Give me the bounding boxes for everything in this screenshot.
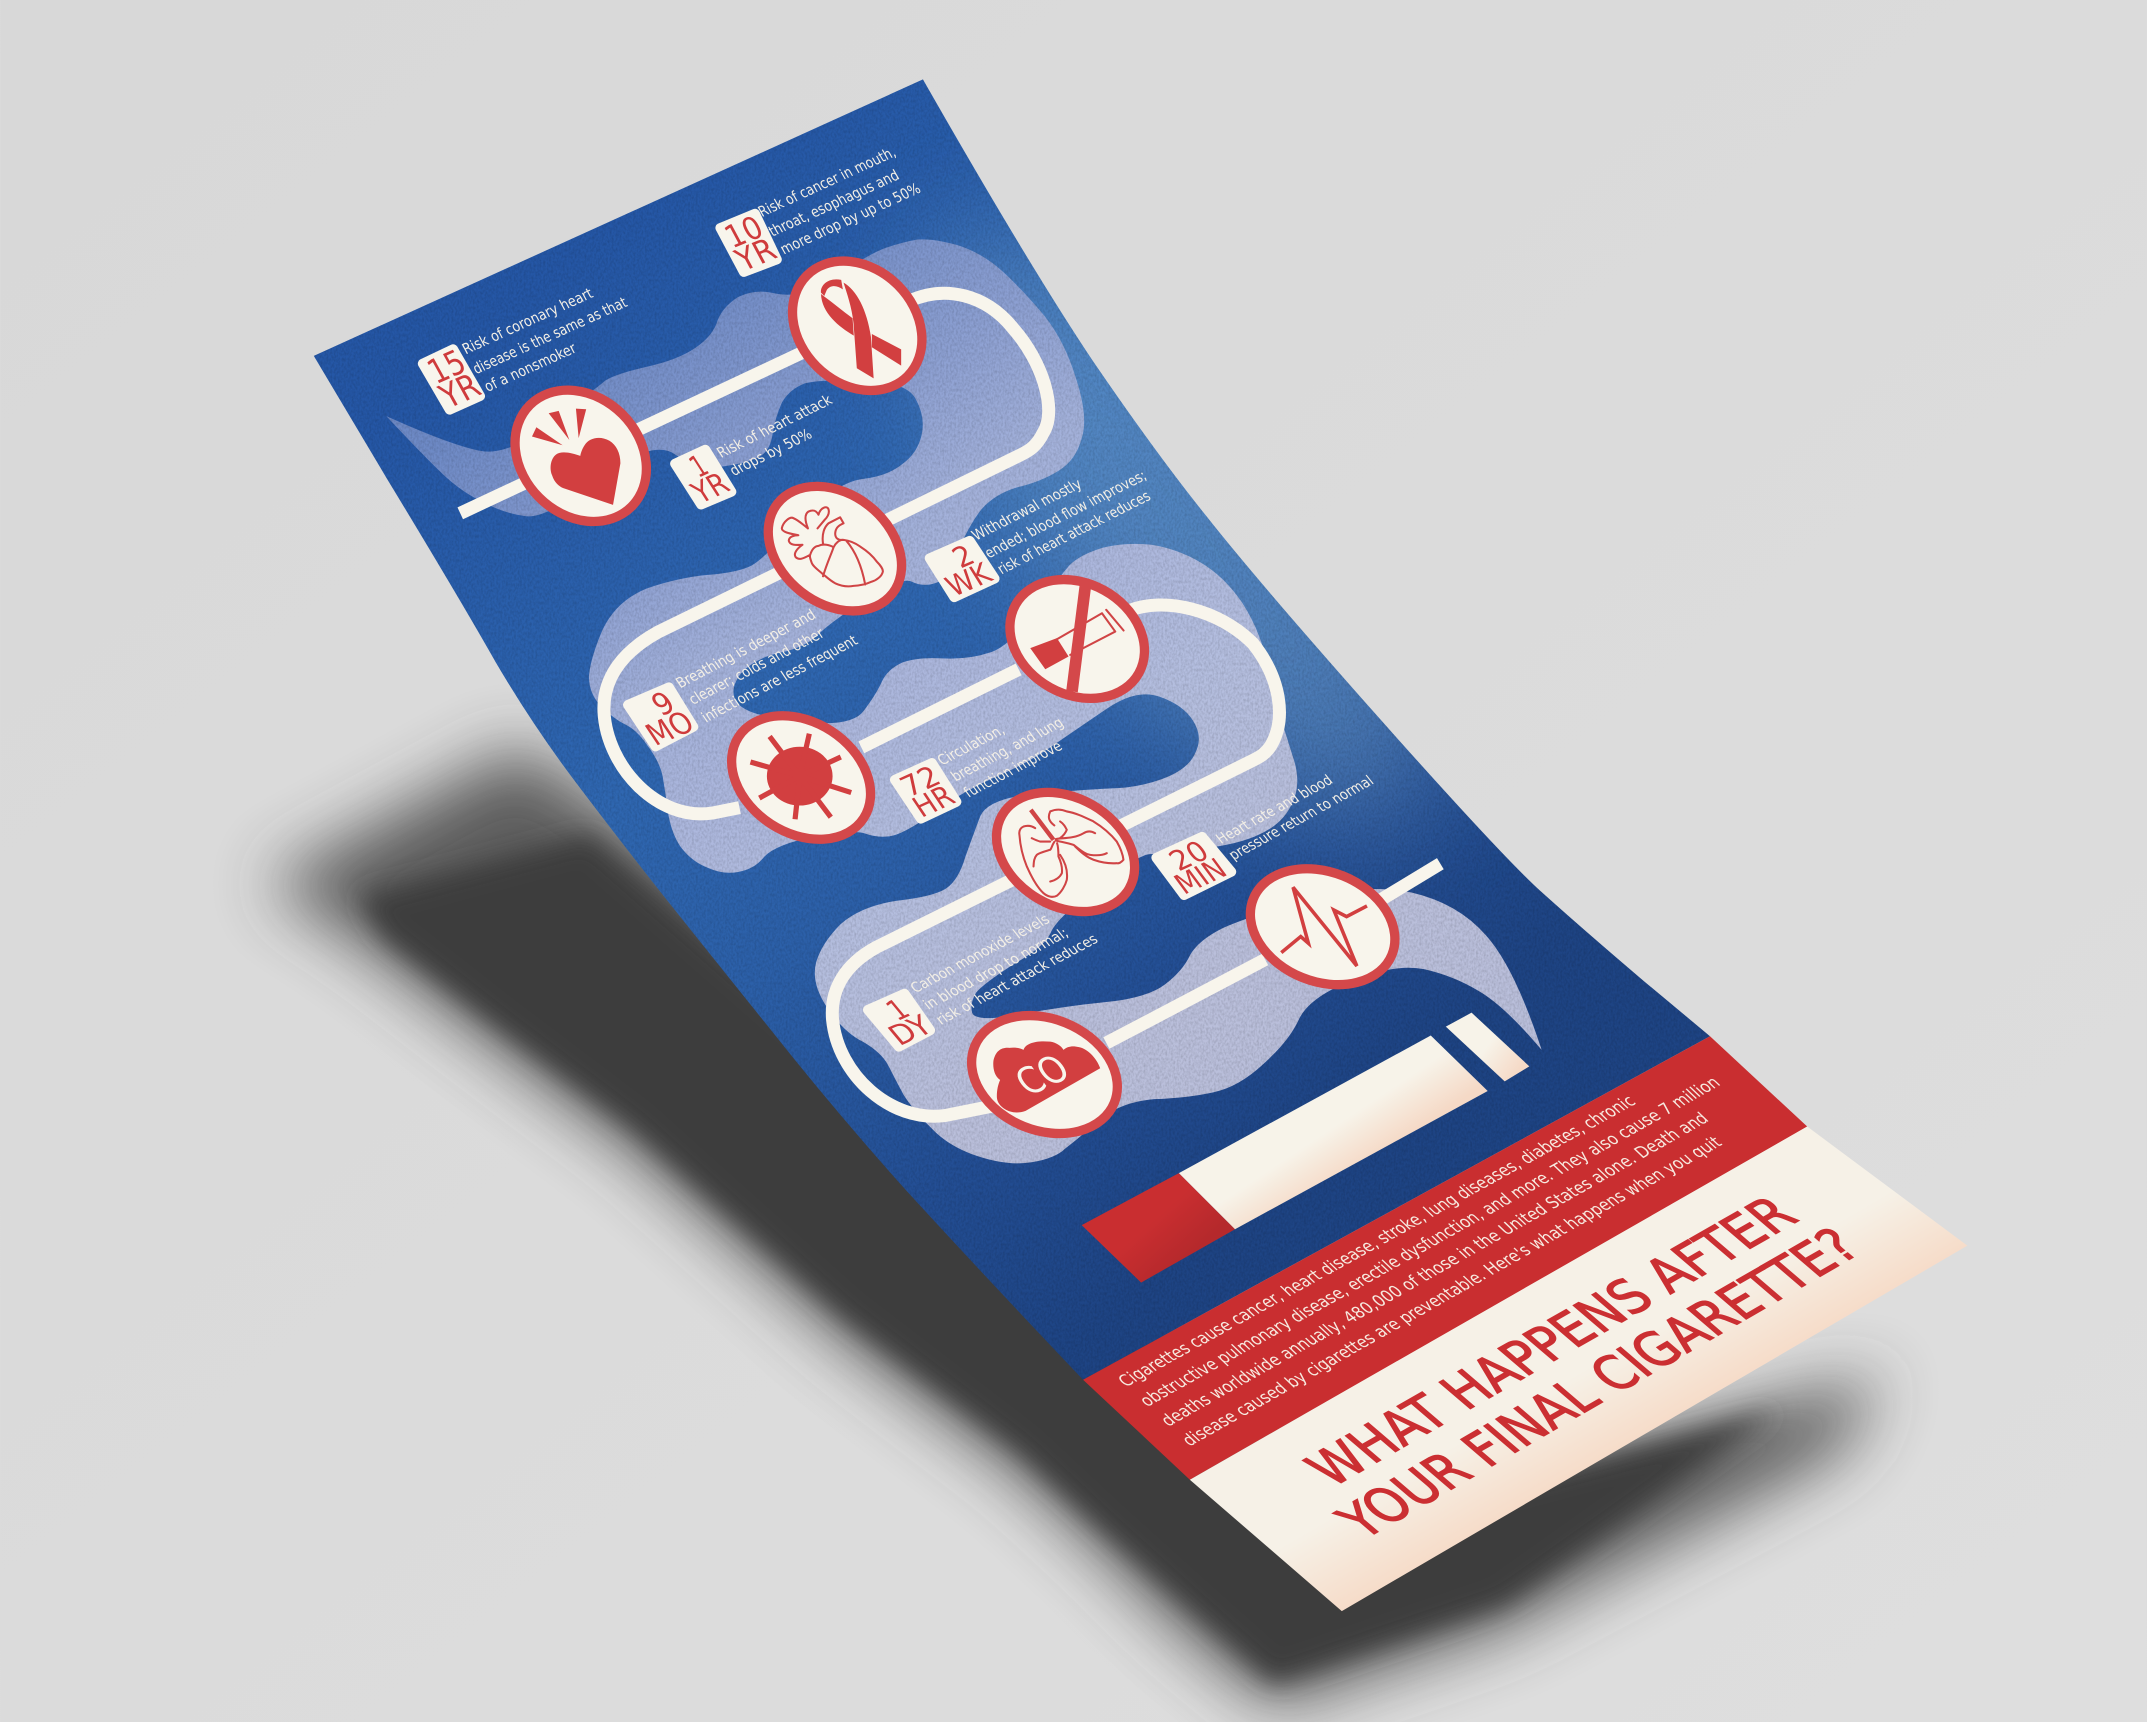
- time badge: 15 YR: YR: [432, 366, 487, 416]
- text: 20 minute benefit: pressure return to normal: [1225, 772, 1377, 863]
- icon: carbon monoxide cloud: CO: [1007, 1047, 1079, 1104]
- time badge: 20 MIN: 20: [1163, 835, 1216, 878]
- text: 15 year benefit: of a nonsmoker: [481, 339, 580, 396]
- icon: virus: [708, 690, 894, 865]
- intro paragraph: obstructive pulmonary disease, erectile dysfunction, and more. They also cause 7 million: [1136, 1073, 1725, 1411]
- time badge: 1 YR: 1: [683, 449, 715, 485]
- milestone: 9 months: [628, 606, 894, 865]
- time badge: 2 WK: 2: [946, 538, 981, 575]
- milestone: 20 minutes: [1156, 772, 1412, 1005]
- milestone: 15 years: [421, 284, 673, 548]
- text: 10 year benefit: [755, 143, 924, 258]
- text: 9 month benefit: clearer; colds and other: [685, 624, 828, 708]
- paper drop shadow: [267, 746, 1882, 1708]
- text: 15 year benefit: Risk of coronary heart: [459, 284, 596, 358]
- time badge: 72 HR: HR: [906, 779, 961, 824]
- icon: heart with rays: [488, 363, 673, 548]
- time badge: 15 YR: [421, 343, 487, 416]
- text: 2 week benefit: risk of heart attack reduces: [994, 487, 1154, 578]
- text: 72 hour benefit: Circulation,: [934, 721, 1008, 769]
- time badge: 15 YR: 15: [421, 343, 473, 391]
- intro paragraph: deaths worldwide annually, 480,000 of those in the United States alone. Death and: [1157, 1109, 1713, 1430]
- time badge: 9 MO: MO: [640, 705, 701, 753]
- time badge: 2 WK: [929, 538, 999, 603]
- icon: no smoking: [989, 556, 1166, 722]
- intro paragraph: Cigarettes cause cancer, heart disease, stroke, lung diseases, diabetes, chronic: [1114, 1092, 1640, 1391]
- text: 1 day benefit: in blood drop to normal;: [920, 924, 1072, 1013]
- text: 1 year benefit: drops by 50%: [726, 425, 815, 479]
- intro paragraph: disease caused by cigarettes are preventable. Here's what happens when you quit: [1178, 1133, 1726, 1450]
- cream title band: [1190, 1127, 1967, 1611]
- text: 15 year benefit: [459, 284, 630, 396]
- milestone: 10 years: [718, 143, 948, 417]
- time badge: 72 HR: 72: [894, 759, 947, 804]
- text: 72 hour benefit: breathing, and lung: [947, 714, 1067, 785]
- cigarette body: [1179, 1036, 1488, 1229]
- time badge: 9 MO: 9: [645, 686, 682, 724]
- cigarette illustration: [1082, 1013, 1529, 1283]
- icon: lungs: [975, 768, 1156, 936]
- cigarette ash tip: [1446, 1013, 1529, 1081]
- text: 20 minute benefit: [1212, 772, 1377, 863]
- cigarette filter: [1082, 1173, 1235, 1283]
- text: 10 year benefit: Risk of cancer in mouth,: [755, 143, 899, 221]
- milestone: 72 hours: [894, 714, 1156, 936]
- timeline path: [460, 293, 1440, 1116]
- time badge: 10 YR: YR: [728, 231, 783, 279]
- text: 9 month benefit: Breathing is deeper and: [672, 606, 819, 692]
- icon: carbon monoxide cloud: [954, 995, 1135, 1155]
- icon: anatomical heart: [744, 461, 926, 637]
- smoke ribbon: [386, 239, 1542, 1163]
- time badge: 1 DY: DY: [881, 1009, 940, 1052]
- text: 2 week benefit: ended; blood flow improves;: [981, 467, 1150, 562]
- milestone: 1 year: [675, 391, 926, 637]
- red intro band: [1083, 1036, 1807, 1480]
- time badge: 2 WK: WK: [939, 556, 999, 603]
- icon: heartbeat: [1233, 848, 1412, 1005]
- time badge: 20 MIN: MIN: [1168, 853, 1234, 901]
- icon: cancer ribbon: [766, 235, 948, 417]
- blue poster field: [314, 79, 1710, 1380]
- title: WHAT HAPPENS AFTER: [1293, 1187, 1811, 1497]
- poster sheet: [301, 68, 1967, 1611]
- text: 20 minute benefit: Heart rate and blood: [1212, 772, 1336, 847]
- light sheen on blue field: [904, 209, 1453, 853]
- time badge: 1 YR: [675, 449, 736, 511]
- time badge: 10 YR: [718, 209, 783, 279]
- text: 72 hour benefit: function improve: [960, 737, 1066, 801]
- milestone: 2 weeks: [929, 467, 1166, 722]
- text: 9 month benefit: infections are less frequent: [698, 632, 861, 726]
- text: 1 day benefit: risk of heart attack reduces: [932, 930, 1102, 1028]
- time badge: 72 HR: [894, 759, 961, 824]
- text: 15 year benefit: disease is the same as that: [470, 293, 630, 378]
- mockup scene: [233, 79, 1967, 1722]
- time badge: 10 YR: 10: [718, 209, 769, 256]
- text: 1 year benefit: [713, 391, 836, 479]
- time badge: 1 YR: YR: [684, 466, 736, 511]
- time badge: 20 MIN: [1156, 835, 1234, 901]
- text: 10 year benefit: more drop by up to 50%: [777, 180, 924, 258]
- text: 1 year benefit: Risk of heart attack: [713, 391, 836, 461]
- time badge: 9 MO: [628, 686, 701, 753]
- text: 72 hour benefit: [934, 714, 1067, 801]
- title: YOUR FINAL CIGARETTE?: [1324, 1219, 1873, 1549]
- text: 2 week benefit: Withdrawal mostly: [968, 475, 1085, 544]
- time badge: 1 DY: [868, 993, 940, 1052]
- time badge: 1 DY: 1: [879, 993, 917, 1027]
- paper grain: [301, 68, 1725, 1396]
- milestone: 1 day: [868, 911, 1135, 1155]
- text: 10 year benefit: throat, esophagus and: [765, 166, 902, 240]
- text: 1 day benefit: Carbon monoxide levels: [907, 911, 1053, 996]
